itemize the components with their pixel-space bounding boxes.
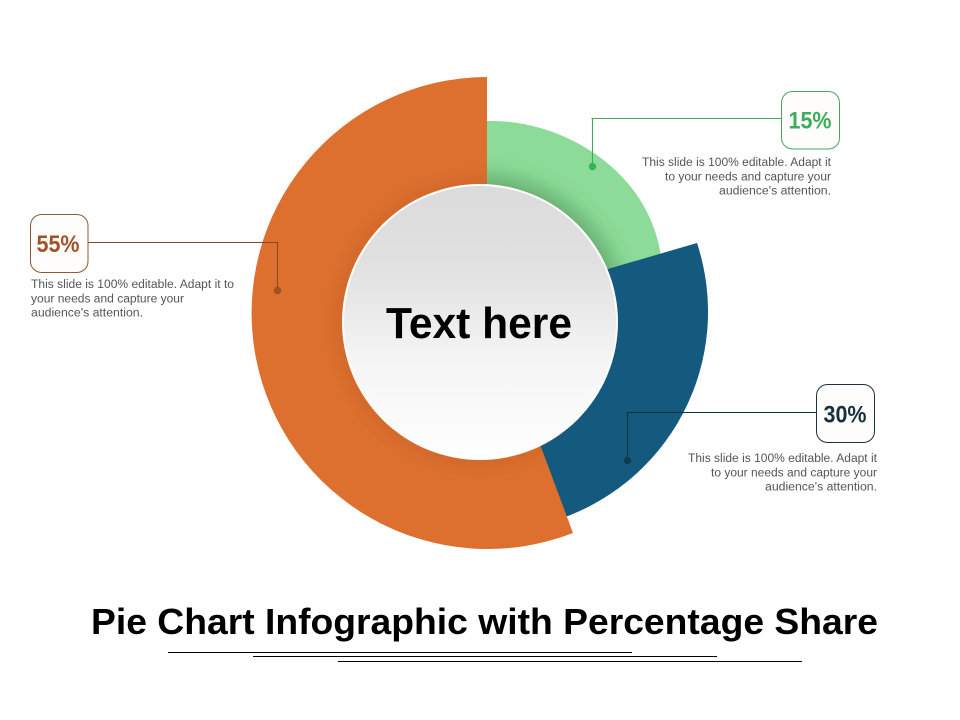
description: This slide is 100% editable. Adapt it to [31, 279, 234, 291]
description [31, 279, 234, 320]
title: Pie Chart Infographic with Percentage Share [91, 601, 878, 642]
value box [30, 214, 88, 272]
description: This slide is 100% editable. Adapt it [688, 453, 878, 465]
dot [624, 457, 631, 464]
description [642, 157, 832, 198]
green shadow [487, 166, 624, 269]
infographic canvas [30, 77, 877, 662]
value box [816, 384, 874, 442]
leader line [592, 118, 781, 166]
callout: 55% [30, 214, 281, 320]
segment: 30% blue [530, 243, 708, 522]
leader line [88, 242, 278, 290]
description: your needs and capture your [31, 294, 184, 306]
description: audience's attention. [719, 186, 831, 198]
orange shadow [340, 182, 541, 462]
donut chart [252, 77, 708, 549]
description: audience's attention. [765, 482, 877, 494]
description: audience's attention. [31, 308, 143, 320]
segment: 15% green [487, 121, 661, 275]
callout: 30% [624, 384, 878, 494]
value: 55% [36, 231, 80, 258]
value: 15% [788, 108, 832, 134]
dot [589, 163, 596, 170]
value box [782, 92, 840, 149]
description [688, 453, 878, 494]
description: to your needs and capture your [665, 172, 831, 184]
title underlines [168, 652, 802, 662]
segment: 55% orange [252, 77, 573, 549]
description: to your needs and capture your [711, 468, 877, 480]
description: This slide is 100% editable. Adapt it [642, 157, 832, 169]
centre label: Text here [386, 299, 572, 348]
callout: 15% [589, 92, 840, 198]
dot [274, 287, 281, 294]
centre circle [342, 184, 618, 460]
value: 30% [824, 402, 866, 428]
leader line [626, 412, 816, 460]
